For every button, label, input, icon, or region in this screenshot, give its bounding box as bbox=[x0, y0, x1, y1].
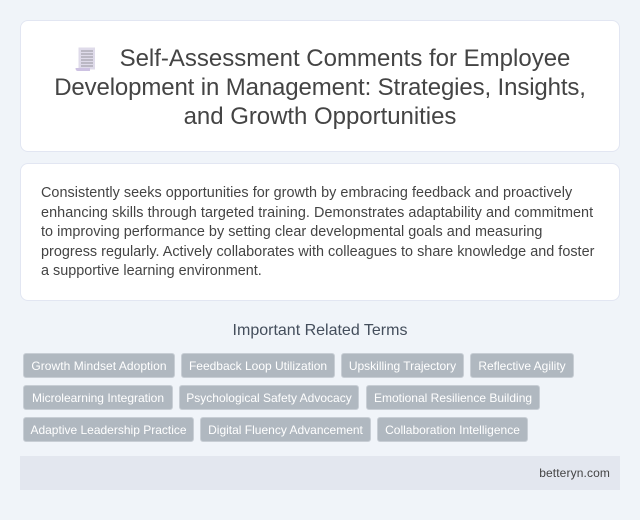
chip list: related terms: Digital Fluency Advancement bbox=[208, 423, 363, 437]
icon: document scroll bbox=[76, 48, 95, 71]
panel: title card bbox=[20, 20, 620, 152]
chip list: related terms: Adaptive Leadership Practice bbox=[30, 423, 187, 437]
title: and Growth Opportunities bbox=[184, 103, 456, 130]
title: Self-Assessment Comments for Employee bbox=[120, 45, 570, 72]
footer text: betteryn.com bbox=[539, 466, 610, 480]
chip list: related terms: Collaboration Intelligence bbox=[385, 423, 520, 437]
chip list: related terms bbox=[23, 353, 574, 442]
text block: description: progress regularly. Actively collaborates with colleagues to share knowledge and foster bbox=[41, 244, 594, 260]
text block: description bbox=[41, 185, 594, 279]
chip list: related terms: Emotional Resilience Building bbox=[374, 391, 532, 405]
chip list: related terms: Upskilling Trajectory bbox=[349, 359, 456, 373]
panel: description card bbox=[20, 163, 620, 301]
heading: related terms: Important Related Terms bbox=[233, 322, 407, 339]
text block: description: Consistently seeks opportunities for growth by embracing feedback and proactively bbox=[41, 185, 572, 201]
title: Development in Management: Strategies, Insights, bbox=[54, 74, 586, 101]
text block: description: to improving performance by setting clear developmental goals and measuring bbox=[41, 224, 542, 240]
title bbox=[54, 45, 586, 130]
chip list: related terms: Psychological Safety Advocacy bbox=[186, 391, 352, 405]
chip list: related terms: Microlearning Integration bbox=[32, 391, 164, 405]
text block: description: a supportive learning environment. bbox=[41, 263, 262, 279]
text block: description: enhancing skills through targeted training. Demonstrates adaptability and commitment bbox=[41, 205, 593, 221]
footer bar bbox=[20, 456, 620, 490]
chip list: related terms: Reflective Agility bbox=[478, 359, 566, 373]
chip list: related terms: Growth Mindset Adoption bbox=[31, 359, 167, 373]
chip list: related terms: Feedback Loop Utilization bbox=[189, 359, 327, 373]
